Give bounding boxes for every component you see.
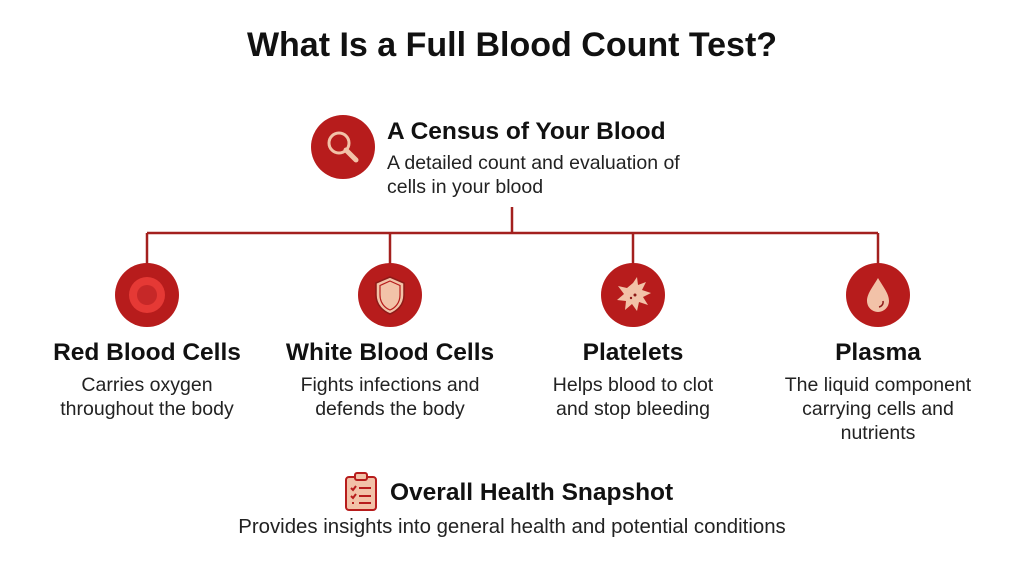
icon: shield (358, 263, 422, 327)
icon: clipboard (345, 472, 377, 511)
panel: white blood cells: White Blood Cells (286, 339, 494, 366)
icon: drop (846, 263, 910, 327)
panel: plasma: Plasma (835, 339, 921, 366)
panel: overall health snapshot (238, 472, 786, 538)
panel: platelets (553, 263, 714, 420)
icon: magnifier (311, 115, 375, 179)
panel: plasma: The liquid component carrying cells and nutrients (785, 374, 971, 444)
icon: platelet (601, 263, 665, 327)
description: A detailed count and evaluation of (387, 152, 680, 174)
title: What Is a Full Blood Count Test? (247, 26, 777, 64)
panel: platelets: Helps blood to clot and stop bleeding (553, 374, 713, 420)
description (387, 152, 680, 198)
heading: Overall Health Snapshot (390, 479, 673, 506)
description: cells in your blood (387, 176, 543, 198)
panel: red blood cells: Red Blood Cells (53, 339, 241, 366)
panel: red blood cells (53, 263, 241, 420)
panel: platelets: Platelets (583, 339, 683, 366)
icon: red cell (115, 263, 179, 327)
panel: red blood cells: Carries oxygen throughout the body (60, 374, 234, 420)
description: Provides insights into general health and potential conditions (238, 516, 786, 538)
panel: white blood cells: Fights infections and defends the body (301, 374, 479, 420)
panel: white blood cells (286, 263, 494, 420)
panel: census (311, 115, 680, 198)
panel: plasma (785, 263, 972, 444)
heading: A Census of Your Blood (387, 118, 666, 145)
